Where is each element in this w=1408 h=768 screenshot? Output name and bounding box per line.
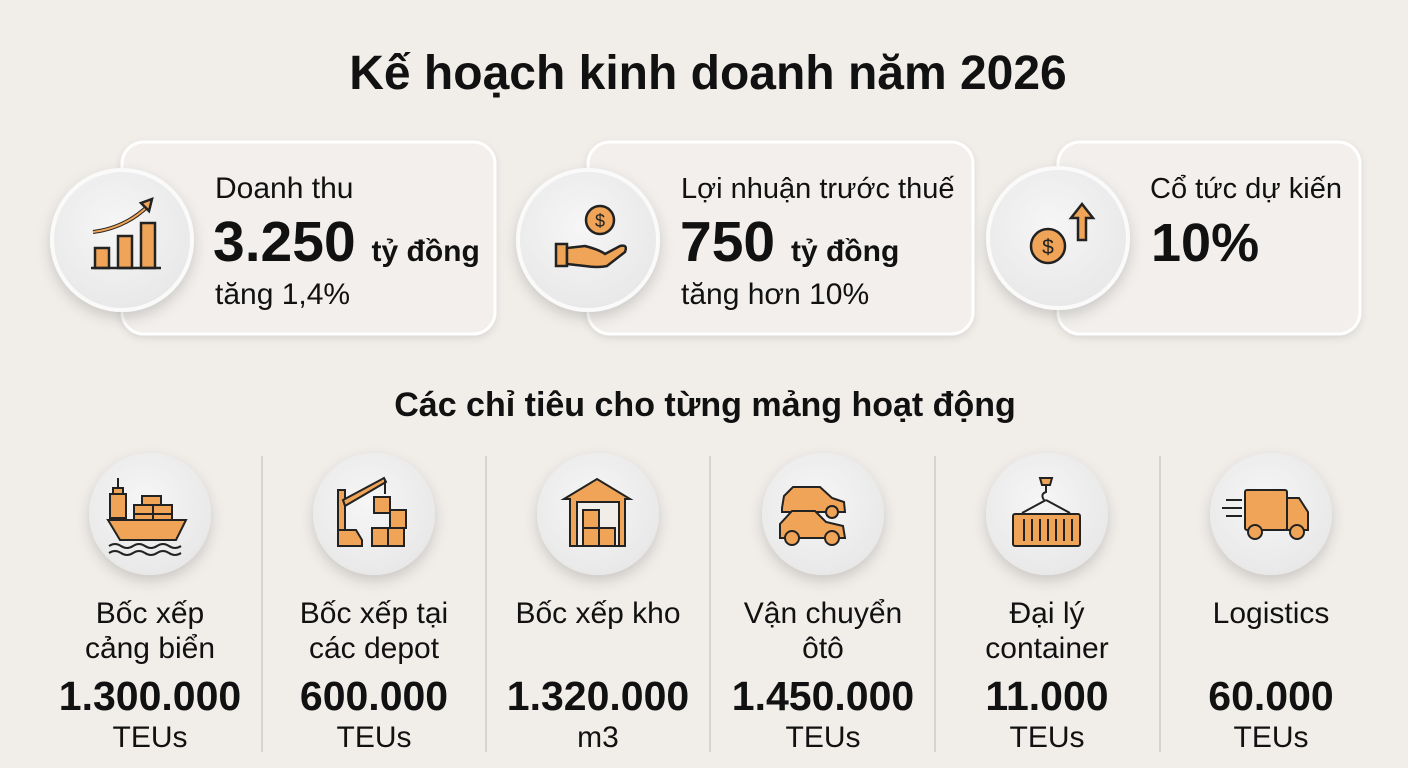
column: logistics xyxy=(1208,453,1334,754)
subtitle: Các chỉ tiêu cho từng mảng hoạt động xyxy=(394,386,1016,424)
panel: loi nhuan: tăng hơn 10% xyxy=(681,278,869,311)
column: logistics: TEUs xyxy=(1234,721,1308,754)
column: boc xep depot: các depot xyxy=(309,632,440,665)
column: boc xep depot: Bốc xếp tại xyxy=(300,597,448,630)
icon: bar chart growth xyxy=(91,199,161,268)
icon: coin with arrow: $ xyxy=(1042,236,1054,259)
column: dai ly container: 11.000 xyxy=(985,673,1109,719)
panel: co tuc xyxy=(988,142,1360,334)
column: boc xep cang bien: TEUs xyxy=(112,721,188,754)
column: van chuyen oto: Vận chuyển xyxy=(744,597,902,630)
column: boc xep depot: 600.000 xyxy=(300,673,448,719)
column: boc xep cang bien: 1.300.000 xyxy=(59,673,241,719)
column: boc xep kho: 1.320.000 xyxy=(507,673,689,719)
column: boc xep kho: Bốc xếp kho xyxy=(515,597,681,630)
column: logistics: Logistics xyxy=(1213,597,1329,630)
column: van chuyen oto: 1.450.000 xyxy=(732,673,914,719)
panel: loi nhuan: Lợi nhuận trước thuế xyxy=(681,173,954,205)
panel: doanh thu xyxy=(52,142,495,334)
icon: ship xyxy=(108,478,186,555)
panel: doanh thu: Doanh thu xyxy=(215,172,353,205)
column: boc xep kho: m3 xyxy=(577,721,619,754)
panel: co tuc: Cổ tức dự kiến xyxy=(1150,173,1342,205)
icon: container on hook xyxy=(1013,478,1080,546)
column: boc xep kho xyxy=(507,453,689,754)
column: boc xep depot xyxy=(300,453,448,754)
icon: crane with boxes xyxy=(338,478,406,546)
column: logistics: 60.000 xyxy=(1208,673,1334,719)
column: van chuyen oto: ôtô xyxy=(802,632,844,665)
column: van chuyen oto xyxy=(732,453,914,754)
column: dai ly container xyxy=(985,453,1109,754)
column: van chuyen oto: TEUs xyxy=(786,721,860,754)
panel: doanh thu: tăng 1,4% xyxy=(215,278,350,311)
column: boc xep cang bien xyxy=(59,453,241,754)
column: boc xep depot: TEUs xyxy=(336,721,412,754)
column: boc xep cang bien: cảng biển xyxy=(85,632,215,665)
icon: hand with coin: $ xyxy=(595,211,605,231)
column: dai ly container: TEUs xyxy=(1010,721,1084,754)
panel: doanh thu: 3.250 tỷ đồng xyxy=(213,210,480,274)
title: Kế hoạch kinh doanh năm 2026 xyxy=(349,47,1067,100)
panel: co tuc: 10% xyxy=(1151,213,1259,273)
panel: loi nhuan xyxy=(518,142,973,334)
icon: truck xyxy=(1222,490,1308,539)
column: dai ly container: container xyxy=(985,632,1109,665)
icon: hand with coin xyxy=(556,206,626,267)
icon: coin with arrow xyxy=(1031,204,1093,263)
icon: cars xyxy=(780,487,845,545)
panel: loi nhuan: 750 tỷ đồng xyxy=(680,210,899,274)
column: boc xep cang bien: Bốc xếp xyxy=(96,597,204,630)
column: dai ly container: Đại lý xyxy=(1009,597,1085,630)
icon: warehouse xyxy=(564,479,630,546)
